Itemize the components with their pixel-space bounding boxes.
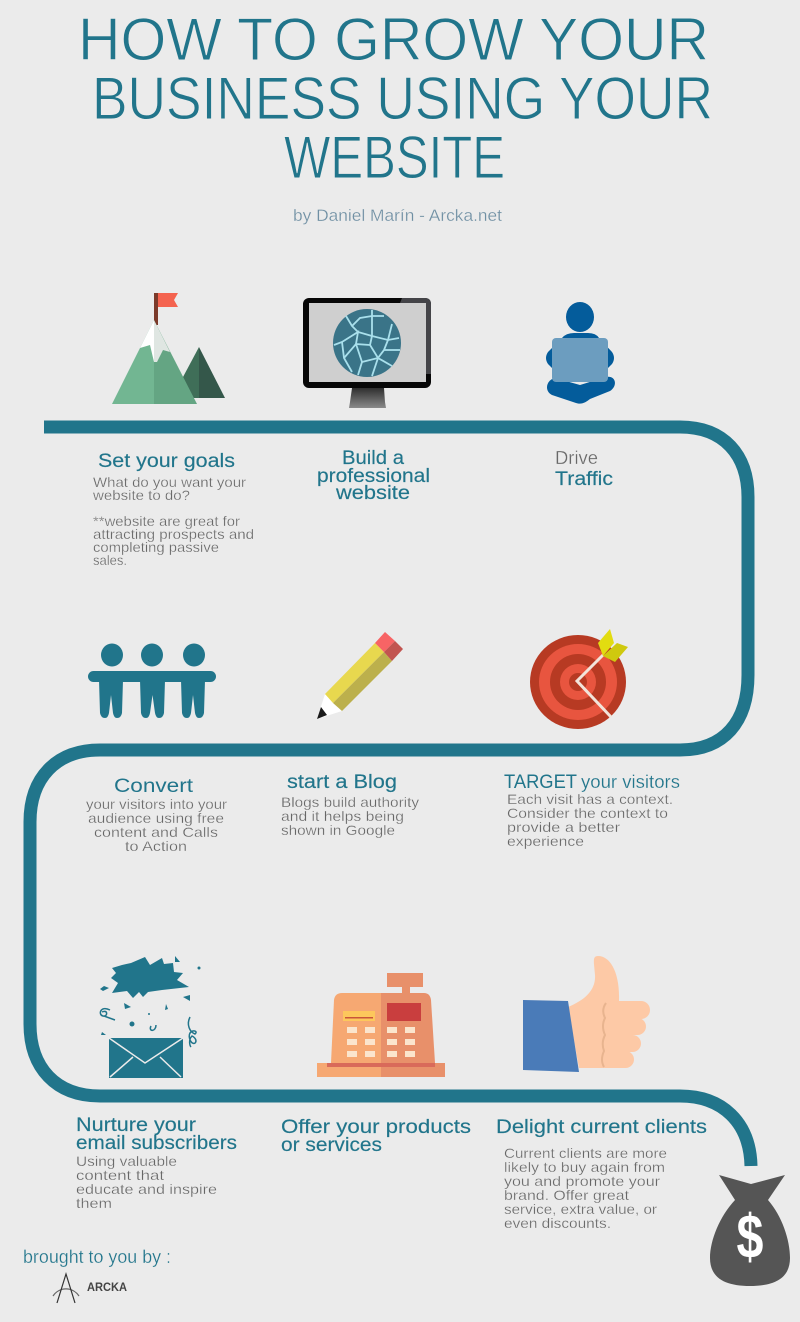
step: set your goals: website to do? (92, 487, 190, 503)
step: delight current clients: even discounts. (504, 1215, 611, 1231)
logo: arcka (53, 1274, 127, 1303)
step: nurture email subscribers: them (76, 1195, 112, 1211)
step: delight current clients: Current clients are more (504, 1145, 667, 1161)
step: set your goals: completing passive (93, 539, 219, 555)
step: nurture email subscribers (76, 1115, 237, 1211)
brought to you by: brought to you by : (23, 1247, 171, 1267)
step: convert: audience using free (88, 810, 224, 826)
step: drive traffic: Traffic (555, 469, 613, 490)
step: delight current clients: you and promote your (504, 1173, 660, 1189)
step: nurture email subscribers: content that (76, 1167, 164, 1183)
step: target your visitors: your visitors (581, 772, 680, 792)
step: target your visitors: Each visit has a context. (507, 791, 673, 807)
step: delight current clients (496, 1117, 707, 1231)
step: start a blog (281, 772, 419, 838)
title: BUSINESS USING YOUR (92, 65, 713, 132)
step: delight current clients: likely to buy again from (504, 1159, 665, 1175)
step: set your goals: attracting prospects and (93, 526, 254, 542)
icon: three people (88, 644, 216, 718)
step: set your goals (92, 451, 254, 568)
title: WEBSITE (284, 124, 505, 191)
step: build a professional website: Build a (342, 448, 404, 469)
step: drive traffic: Drive (555, 448, 598, 468)
step: build a professional website: website (335, 483, 410, 504)
step: target your visitors: experience (507, 833, 584, 849)
title: HOW TO GROW YOUR (78, 6, 709, 73)
step: offer products or services: or services (281, 1135, 382, 1156)
icon: monitor with globe (303, 298, 431, 408)
step: set your goals: sales. (93, 552, 127, 568)
step: offer products or services (281, 1117, 471, 1156)
step: convert (86, 776, 227, 854)
step: set your goals: What do you want your (93, 474, 246, 490)
step: convert: content and Calls (94, 824, 218, 840)
step: nurture email subscribers: Using valuable (76, 1153, 177, 1169)
step: nurture email subscribers: Nurture your (76, 1115, 197, 1136)
step: build a professional website (317, 448, 430, 504)
title (78, 6, 713, 191)
logo: arcka: ARCKA (87, 1280, 127, 1294)
icon: target with arrow (530, 629, 628, 729)
step: drive traffic (555, 448, 613, 490)
icon: mountains with flag (112, 293, 225, 404)
step: delight current clients: Delight current clients (496, 1117, 707, 1138)
step: build a professional website: professional (317, 466, 430, 487)
step: nurture email subscribers: email subscribers (76, 1133, 237, 1154)
icon: pencil (317, 632, 403, 719)
step: convert: to Action (125, 838, 187, 854)
step: start a blog: Blogs build authority (281, 794, 419, 810)
subtitle: by Daniel Marín - Arcka.net (293, 206, 502, 225)
icon: person with laptop (546, 302, 615, 404)
step: start a blog: start a Blog (287, 772, 397, 793)
step: convert: your visitors into your (86, 796, 227, 812)
step: set your goals: **website are great for (93, 513, 240, 529)
step: set your goals: Set your goals (98, 451, 235, 472)
step: target your visitors: TARGET (504, 772, 577, 793)
step: offer products or services: Offer your products (281, 1117, 471, 1138)
icon: money bag (710, 1175, 790, 1286)
icon: money bag: $ (737, 1202, 764, 1271)
step: target your visitors: provide a better (507, 819, 620, 835)
step: start a blog: shown in Google (281, 822, 395, 838)
icon: cash register (317, 973, 445, 1077)
step: target your visitors (504, 772, 680, 849)
step: delight current clients: service, extra value, or (504, 1201, 657, 1217)
step: convert: Convert (114, 776, 194, 797)
winding path (30, 427, 751, 1166)
step: delight current clients: brand. Offer great (504, 1187, 629, 1203)
icon: envelope with confetti burst (100, 956, 200, 1078)
step: target your visitors: Consider the context to (507, 805, 668, 821)
step: start a blog: and it helps being (281, 808, 404, 824)
step: nurture email subscribers: educate and inspire (76, 1181, 217, 1197)
icon: thumbs up (523, 956, 650, 1072)
